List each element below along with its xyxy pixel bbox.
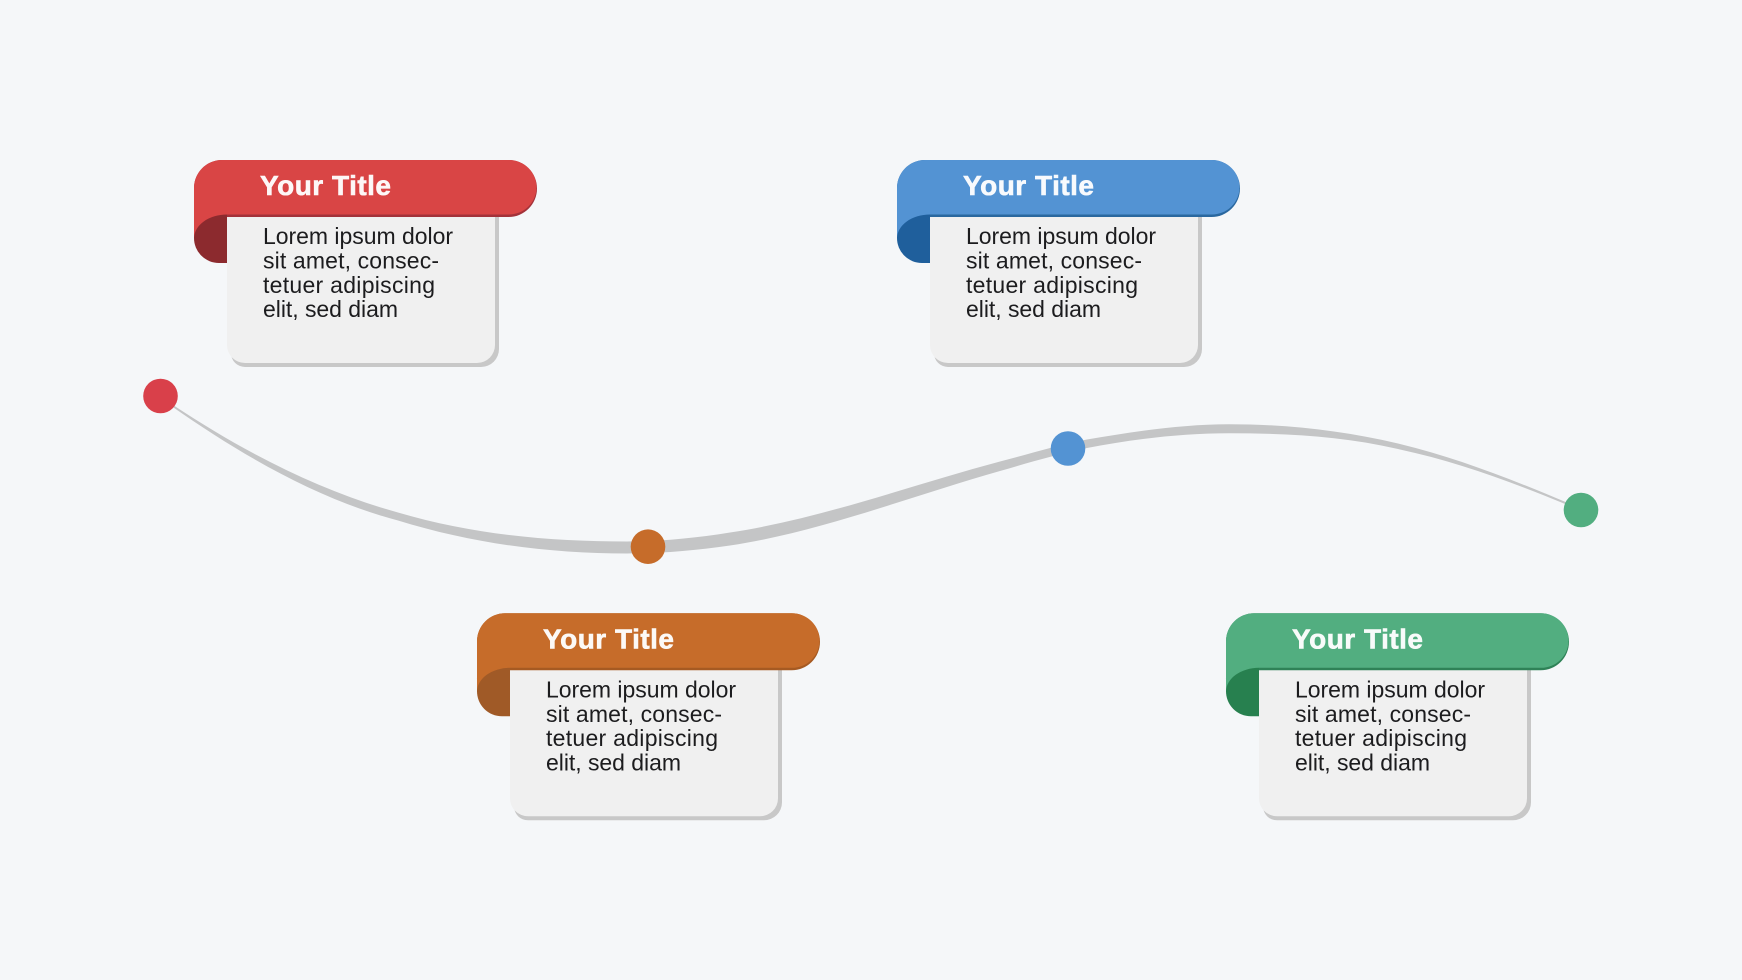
body text: elit, sed diam: [966, 296, 1101, 322]
body text: sit amet, consec-: [1295, 701, 1471, 727]
title: Your Title: [963, 170, 1094, 201]
ribbon fold: [1226, 663, 1259, 716]
body text: sit amet, consec-: [966, 248, 1142, 274]
body text: elit, sed diam: [263, 296, 398, 322]
body text: [1295, 676, 1485, 775]
body text: sit amet, consec-: [546, 701, 722, 727]
title: Your Title: [543, 623, 674, 654]
timeline dot: red: [143, 379, 178, 413]
timeline dot: green: [1564, 493, 1598, 527]
title: Your Title: [260, 170, 391, 201]
body text: tetuer adipiscing: [263, 272, 435, 298]
body text: Lorem ipsum dolor: [1295, 676, 1485, 702]
panel: green card: [1226, 613, 1569, 820]
body text: [546, 676, 736, 775]
timeline dot: orange: [631, 529, 665, 564]
timeline dot: blue: [1051, 431, 1085, 466]
body text: Lorem ipsum dolor: [263, 223, 453, 249]
card body: [510, 663, 782, 820]
panel: red card: [194, 160, 537, 367]
title: Your Title: [1292, 623, 1423, 654]
panel: orange card: [477, 613, 820, 820]
body text: elit, sed diam: [1295, 749, 1430, 775]
body text: [263, 223, 453, 322]
ribbon header: [477, 613, 820, 691]
body text: tetuer adipiscing: [546, 725, 718, 751]
ribbon fold: [477, 663, 510, 716]
card body: [1259, 663, 1531, 820]
body text: [966, 223, 1156, 322]
ribbon header: [897, 160, 1240, 238]
curved timeline line: [172, 405, 1568, 554]
body text: Lorem ipsum dolor: [546, 676, 736, 702]
panel: blue card: [897, 160, 1240, 367]
card body: [930, 210, 1202, 367]
body text: sit amet, consec-: [263, 248, 439, 274]
body text: tetuer adipiscing: [1295, 725, 1467, 751]
body text: tetuer adipiscing: [966, 272, 1138, 298]
body text: Lorem ipsum dolor: [966, 223, 1156, 249]
ribbon header: [194, 160, 537, 238]
ribbon header: [1226, 613, 1569, 691]
ribbon fold: [897, 210, 930, 263]
card body: [227, 210, 499, 367]
body text: elit, sed diam: [546, 749, 681, 775]
ribbon fold: [194, 210, 227, 263]
